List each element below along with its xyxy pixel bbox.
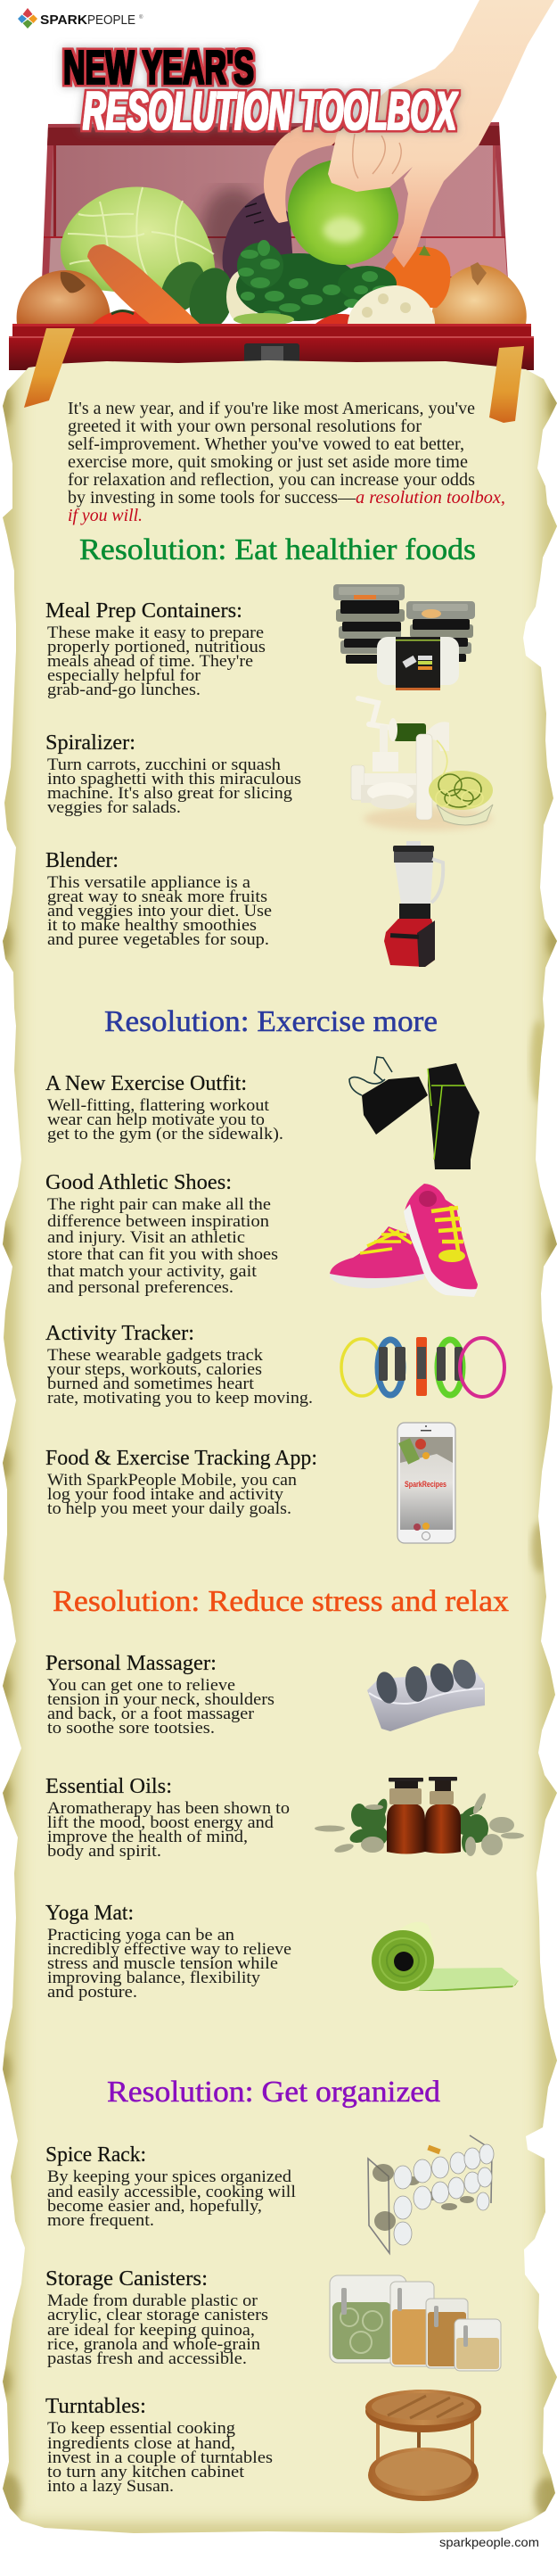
tape left	[24, 328, 75, 408]
intro text	[68, 399, 505, 525]
item: tracking app: log your food intake and activity	[47, 1485, 284, 1504]
item: essential oils: body and spirit.	[47, 1842, 161, 1861]
carrot	[87, 244, 200, 324]
icon: spice rack	[368, 2135, 494, 2253]
icon: activity trackers	[341, 1337, 504, 1397]
toolbox base	[9, 324, 534, 370]
item: tracking app: Food & Exercise Tracking App:	[45, 1447, 317, 1470]
item: essential oils: improve the health of mind,	[47, 1828, 248, 1846]
left cauliflower	[226, 270, 258, 324]
item: yoga mat: and posture.	[47, 1983, 137, 2002]
item: tracking app: With SparkPeople Mobile, you can	[47, 1471, 298, 1490]
item: storage canisters: Storage Canisters:	[45, 2267, 208, 2291]
item: tracking app: to help you meet your daily goals.	[47, 1499, 291, 1518]
item: meal prep containers	[45, 599, 266, 699]
item: turntables: into a lazy Susan.	[47, 2477, 174, 2496]
item: turntables: invest in a couple of turntables	[47, 2448, 273, 2467]
item: activity tracker: These wearable gadgets track	[47, 1346, 264, 1365]
item: spice rack: and easily accessible, cooking will	[47, 2183, 296, 2201]
item: yoga mat: incredibly effective way to relieve	[47, 1940, 291, 1959]
intro text: greeted it with your own personal resolutions for	[68, 417, 422, 436]
item: spice rack: become easier and, hopefully,	[47, 2197, 262, 2216]
intro text: exercise more, quit smoking or just set aside more time	[68, 452, 468, 472]
item: personal massager: Personal Massager:	[45, 1652, 217, 1675]
item: meal prep containers: Meal Prep Containers:	[45, 599, 242, 623]
item: exercise outfit: get to the gym (or the sidewalk).	[47, 1125, 283, 1144]
item: exercise outfit	[45, 1072, 283, 1144]
tomato right	[315, 314, 365, 324]
intro text: It's a new year, and if you're like most Americans, you've	[68, 399, 475, 418]
icon: blender	[384, 841, 443, 967]
arm and fist	[328, 0, 554, 268]
item: spice rack: more frequent.	[47, 2211, 154, 2230]
item: meal prep containers: especially helpful for	[47, 666, 201, 685]
item: blender: This versatile appliance is a	[47, 873, 251, 892]
item: turntables: To keep essential cooking	[47, 2419, 236, 2438]
bottles	[389, 1778, 423, 1782]
item: blender: it to make healthy smoothies	[47, 916, 257, 935]
parsley	[236, 240, 397, 321]
toolbox lid	[42, 122, 508, 281]
item: meal prep containers: grab-and-go lunches.	[47, 681, 201, 699]
item: athletic shoes	[45, 1171, 278, 1297]
item: blender	[45, 849, 272, 949]
vegetables in the toolbox	[17, 187, 527, 334]
item: storage canisters: rice, granola and whole-grain	[47, 2335, 261, 2354]
green cabbage	[61, 187, 215, 299]
item: activity tracker	[45, 1322, 313, 1408]
intro text: a resolution toolbox,	[356, 488, 505, 508]
icon: yoga mat	[372, 1922, 519, 1991]
item: essential oils: lift the mood, boost energy and	[47, 1813, 274, 1832]
footer url: sparkpeople.com	[439, 2535, 539, 2549]
item: meal prep containers: meals ahead of time. They're	[47, 652, 253, 671]
clasp	[244, 343, 299, 364]
apple base	[233, 313, 294, 326]
icon: athletic shoes	[330, 1184, 478, 1297]
icon: storage canisters	[330, 2275, 501, 2371]
right onion	[431, 262, 527, 324]
item: athletic shoes: and injury. Visit an athletic	[47, 1228, 245, 1247]
icon: phone: SparkRecipes	[405, 1480, 446, 1490]
item: yoga mat: improving balance, flexibility	[47, 1969, 261, 1987]
item: blender: Blender:	[45, 849, 119, 872]
heading: get organized: Resolution: Get organized	[107, 2076, 440, 2109]
item: yoga mat: stress and muscle tension while	[47, 1954, 278, 1973]
item: yoga mat: Yoga Mat:	[45, 1902, 134, 1925]
item: essential oils: Essential Oils:	[45, 1775, 172, 1798]
item: turntables	[45, 2395, 273, 2496]
item: turntables: to turn any kitchen cabinet	[47, 2463, 245, 2481]
right cauliflower	[348, 285, 435, 324]
item: storage canisters: are ideal for keeping quinoa,	[47, 2321, 255, 2340]
item: athletic shoes: Good Athletic Shoes:	[45, 1171, 232, 1194]
item: turntables: ingredients close at hand,	[47, 2434, 235, 2453]
item: storage canisters: pastas fresh and accessible.	[47, 2349, 247, 2368]
heading: exercise more: Resolution: Exercise more	[104, 1005, 438, 1038]
left finger	[264, 125, 346, 223]
intro text: if you will.	[68, 506, 143, 525]
item: activity tracker: your steps, workouts, calories	[47, 1360, 262, 1379]
item: essential oils	[45, 1775, 290, 1861]
item: exercise outfit: wear can help motivate you to	[47, 1110, 265, 1129]
item: blender: and veggies into your diet. Use	[47, 902, 272, 921]
intro text: for relaxation and reflection, you can increase your odds	[68, 470, 475, 490]
icon: turntable	[365, 2390, 481, 2501]
heading: reduce stress: Resolution: Reduce stress and relax	[53, 1585, 509, 1618]
item: exercise outfit: Well-fitting, flattering workout	[47, 1096, 270, 1115]
item: athletic shoes: that match your activity, gait	[47, 1262, 258, 1281]
item: yoga mat	[45, 1902, 291, 2002]
item: athletic shoes: store that can fit you with shoes	[47, 1245, 278, 1264]
item: spice rack: By keeping your spices organized	[47, 2167, 292, 2186]
item: athletic shoes: and personal preferences.	[47, 1278, 233, 1297]
logo: ®	[139, 14, 143, 21]
item: spiralizer: into spaghetti with this miraculous	[47, 770, 301, 788]
item: blender: and puree vegetables for soup.	[47, 930, 269, 949]
tomato left	[93, 310, 156, 324]
item: blender: great way to sneak more fruits	[47, 888, 267, 906]
item: spiralizer: Turn carrots, zucchini or squash	[47, 755, 282, 774]
logo	[18, 8, 143, 29]
item: spiralizer	[45, 731, 301, 817]
icon: essential oils	[315, 1777, 524, 1856]
item: activity tracker: burned and sometimes heart	[47, 1375, 255, 1393]
left herbs	[315, 1797, 389, 1854]
tape right	[489, 346, 524, 423]
item: turntables: Turntables:	[45, 2395, 146, 2418]
left onion	[17, 270, 111, 324]
title line 1: NEW YEAR'S	[63, 41, 254, 95]
title	[63, 41, 458, 141]
item: storage canisters: Made from durable plastic or	[47, 2291, 258, 2310]
icon: meal prep containers	[333, 584, 475, 690]
item: activity tracker: rate, motivating you to keep moving.	[47, 1389, 313, 1408]
item: spice rack: Spice Rack:	[45, 2143, 146, 2167]
item: exercise outfit: A New Exercise Outfit:	[45, 1072, 247, 1095]
item: spiralizer: machine. It's also great for slicing	[47, 784, 293, 803]
item: personal massager: to soothe sore tootsies.	[47, 1719, 215, 1738]
hand holding apple	[264, 0, 554, 268]
pepper	[385, 245, 450, 308]
item: storage canisters: acrylic, clear storage canisters	[47, 2306, 268, 2324]
item: storage canisters	[45, 2267, 268, 2368]
icon: exercise outfit	[349, 1057, 479, 1169]
intro text: self-improvement. Whether you've vowed to eat better,	[68, 434, 464, 454]
right herbs	[455, 1792, 524, 1856]
cucumbers	[152, 254, 239, 334]
icon: phone	[397, 1423, 455, 1543]
item: tracking app	[45, 1447, 317, 1518]
item: meal prep containers: properly portioned, nutritious	[47, 638, 266, 656]
item: personal massager: tension in your neck, shoulders	[47, 1690, 274, 1709]
icon: spiralizer	[351, 698, 493, 830]
item: personal massager	[45, 1652, 274, 1738]
item: essential oils: Aromatherapy has been shown to	[47, 1799, 290, 1818]
heading: eat healthier foods: Resolution: Eat healthier foods	[79, 533, 476, 566]
green apple	[288, 159, 398, 265]
item: spice rack	[45, 2143, 296, 2230]
intro text: by investing in some tools for success—	[68, 488, 356, 508]
item: athletic shoes: difference between inspiration	[47, 1212, 270, 1231]
icon: massager	[367, 1656, 485, 1731]
item: personal massager: You can get one to relieve	[47, 1676, 235, 1695]
red cabbage	[223, 192, 294, 281]
logo: PEOPLE	[87, 12, 135, 28]
item: spiralizer: Spiralizer:	[45, 731, 135, 755]
item: athletic shoes: The right pair can make all the	[47, 1195, 271, 1214]
item: spiralizer: veggies for salads.	[47, 798, 181, 817]
logo: SPARK	[40, 12, 87, 28]
item: meal prep containers: These make it easy to prepare	[47, 623, 264, 642]
item: personal massager: and back, or a foot massager	[47, 1705, 255, 1723]
item: activity tracker: Activity Tracker:	[45, 1322, 194, 1345]
item: yoga mat: Practicing yoga can be an	[47, 1926, 235, 1944]
